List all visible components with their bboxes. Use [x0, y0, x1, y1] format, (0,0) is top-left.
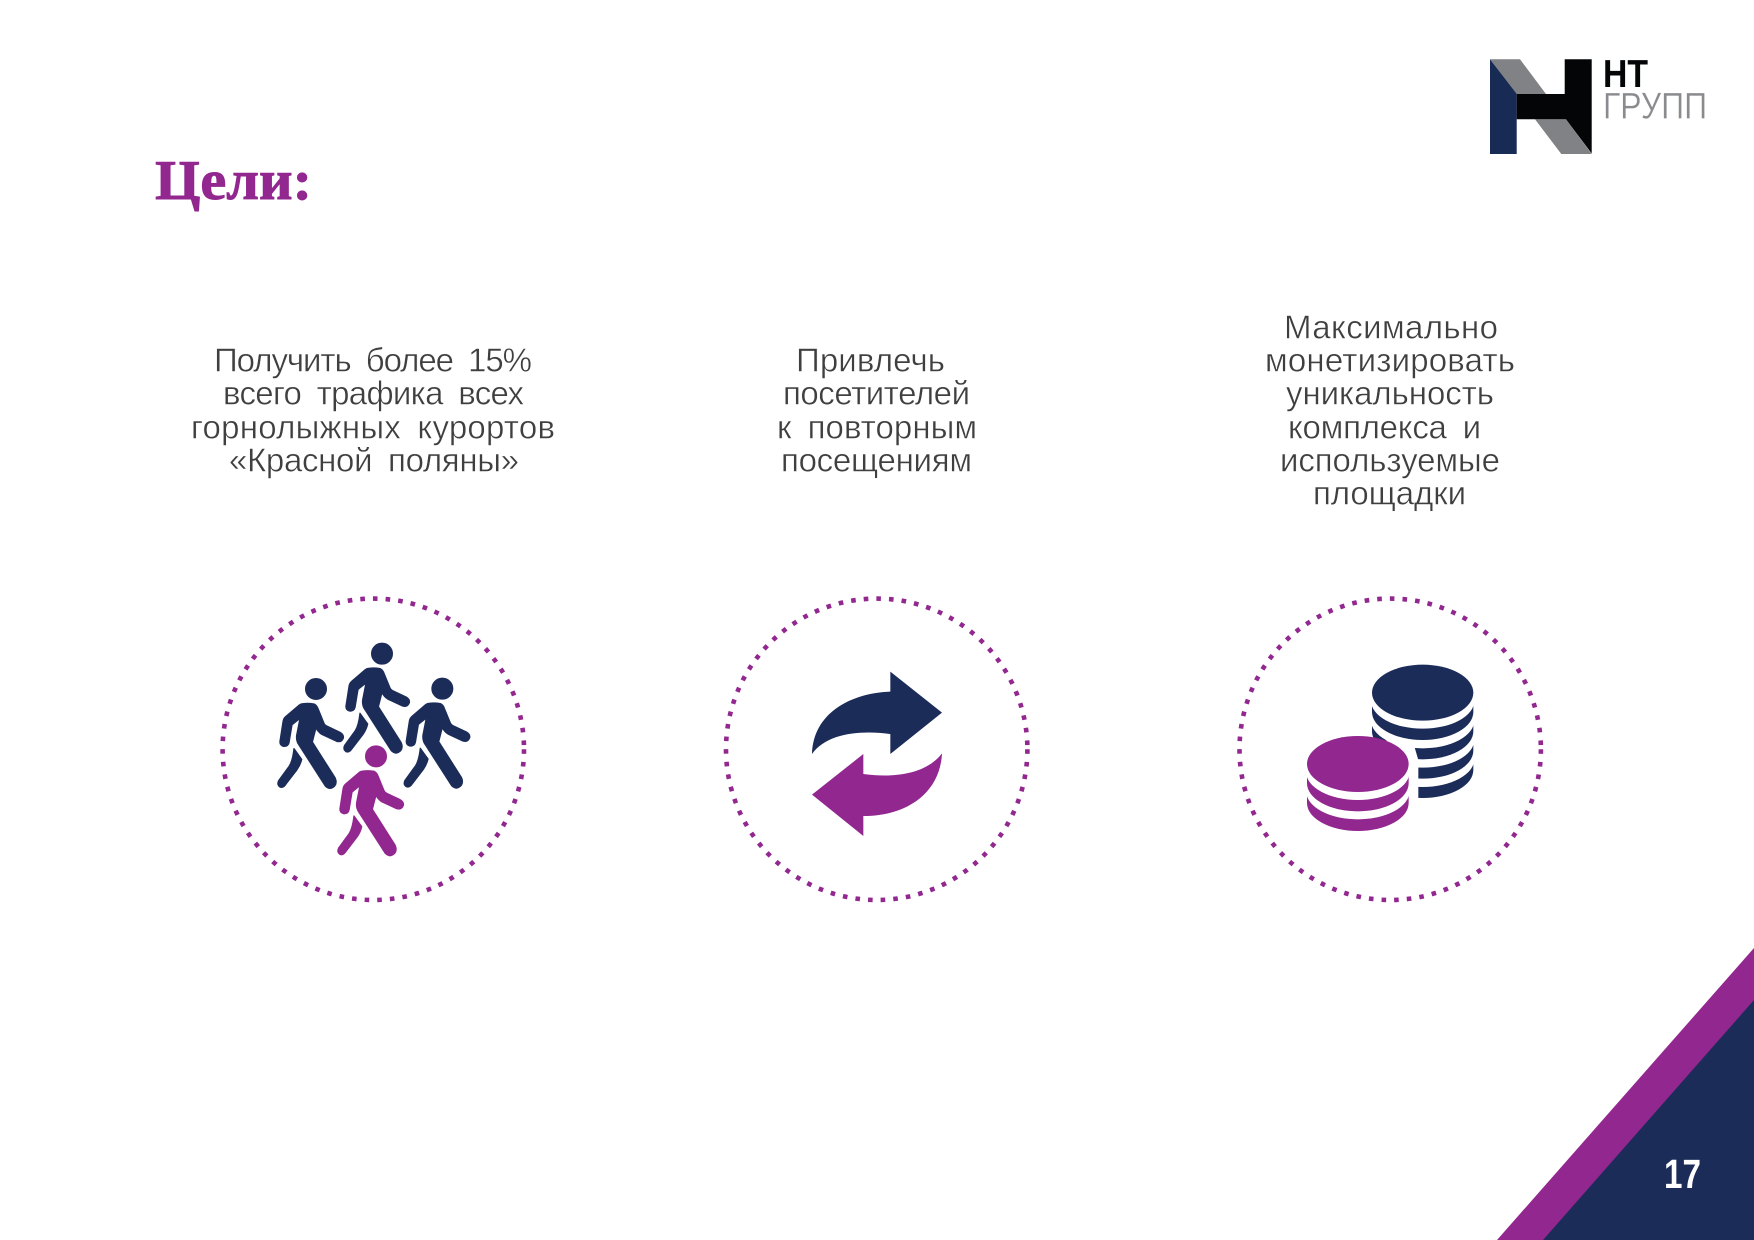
- text block: goal 1: [191, 341, 555, 478]
- logo: HT Group: НТ: [1603, 53, 1648, 96]
- text block: goal 3: используемые: [1280, 441, 1500, 478]
- text block: goal 3: площадки: [1313, 475, 1466, 512]
- text block: goal 1: всего трафика всех: [223, 375, 524, 412]
- text block: goal 3: комплекса и: [1288, 408, 1481, 445]
- text block: goal 2: посещениям: [781, 441, 972, 478]
- text block: goal 2: посетителей: [783, 375, 970, 412]
- logo: HT Group: [1490, 53, 1707, 154]
- icon: circular arrows: [812, 672, 942, 836]
- text block: goal 2: Привлечь: [796, 341, 945, 378]
- text block: goal 1: Получить более 15%: [214, 341, 532, 378]
- text block: goal 3: уникальность: [1286, 375, 1494, 412]
- text block: goal 2: [777, 341, 977, 478]
- dotted circle 1: [223, 599, 524, 900]
- dotted circle 2: [726, 599, 1027, 900]
- text block: goal 3: Максимально: [1284, 309, 1498, 346]
- text block: goal 2: к повторным: [777, 408, 977, 445]
- logo: HT Group: ГРУПП: [1603, 86, 1707, 127]
- text block: goal 1: «Красной поляны»: [229, 441, 519, 478]
- text block: goal 1: горнолыжных курортов: [191, 408, 555, 445]
- text block: goal 3: монетизировать: [1265, 341, 1515, 378]
- icon: group of walking people: [278, 643, 470, 856]
- dotted circle 3: [1240, 599, 1541, 900]
- corner decoration: navy triangle: [1543, 1000, 1754, 1240]
- title: Цели:: [155, 150, 312, 212]
- page number: 17: [1664, 1151, 1701, 1197]
- icon: coin stacks: [1306, 665, 1474, 831]
- corner decoration: purple stripe: [1497, 948, 1754, 1240]
- text block: goal 3: [1265, 309, 1515, 512]
